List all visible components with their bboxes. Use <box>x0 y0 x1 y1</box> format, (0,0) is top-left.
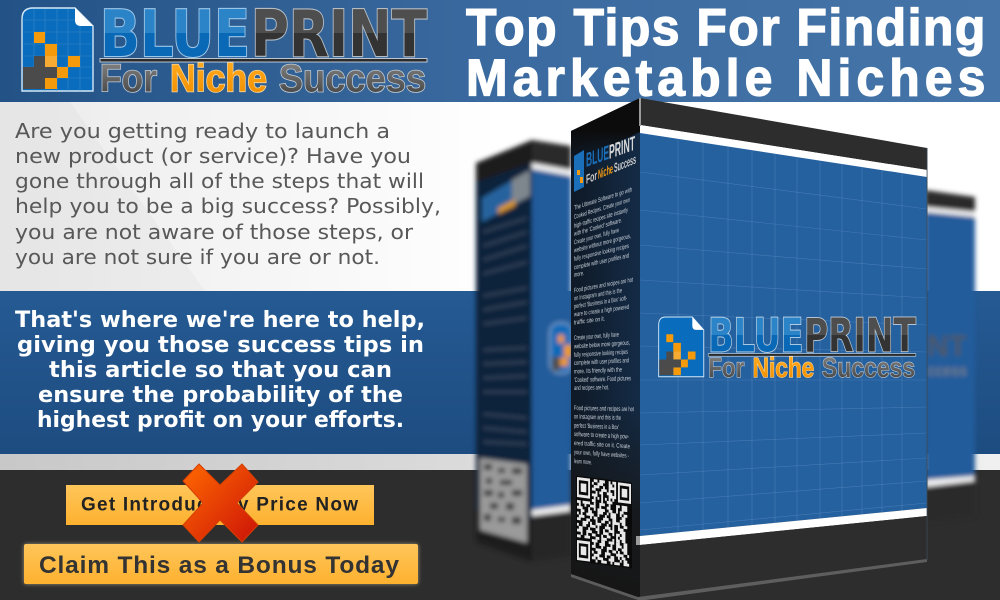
logo word BLUEPRINT: PRINT <box>251 0 427 72</box>
blurred back box: right: NT <box>927 330 967 363</box>
box front top band <box>640 98 927 170</box>
title <box>466 0 985 107</box>
side description text: learn more. <box>574 458 592 466</box>
box corner highlight <box>636 98 641 545</box>
main product box <box>571 98 928 600</box>
side description text: Food pictures and recipes are hot <box>574 405 634 413</box>
side description text: website without more gorgeous, <box>573 233 631 255</box>
side description text: on Instagram and this is the <box>574 287 622 302</box>
side description text: Create your own, fully have <box>574 331 619 342</box>
box side panel: PRINT <box>609 132 635 164</box>
highlighted paragraph: ensure the probability of the <box>38 382 403 408</box>
side description text: more. Its friendly with the <box>574 367 622 375</box>
header band <box>0 0 1000 102</box>
main product box: Success <box>614 152 636 175</box>
highlighted paragraph: highest profit on your efforts. <box>37 407 404 433</box>
side description text: The Ultimate Software to go with <box>574 187 632 212</box>
claim bonus button: Claim This as a Bonus Today <box>39 552 399 579</box>
side description text: perfect 'Business in a Box' <box>574 423 619 431</box>
box logo word: BLUE <box>708 310 803 363</box>
old price button <box>66 485 374 525</box>
intro paragraph: gone through all of the steps that will <box>15 169 424 193</box>
box front blue panel with grid <box>640 133 927 536</box>
logo tagline: Success <box>279 58 426 100</box>
side description text: Create your own, fully have <box>574 227 619 246</box>
logo word BLUEPRINT <box>100 0 427 72</box>
box right edge <box>926 148 928 560</box>
intro paragraph: new product (or service)? Have you <box>15 144 411 168</box>
side description text: more. <box>574 270 584 279</box>
side description text: your own, fully have websites - <box>574 449 629 460</box>
side description text: high-traffic recipes site instantly <box>574 207 628 230</box>
old price button: Get Introductory Price Now <box>81 494 358 516</box>
box bottom edge highlight <box>638 559 927 600</box>
side description text: ered traffic site on it. Create <box>574 440 630 450</box>
side description text: software to create a high pow- <box>574 431 629 441</box>
highlighted paragraph: giving you those success tips in <box>17 332 424 358</box>
side description text: 'Cooked' software. Food pictures <box>574 375 631 384</box>
blurred back box: left <box>476 140 572 562</box>
side description text: perfect 'Business in a Box' soft- <box>574 295 627 310</box>
side description text: ware to create a high powered <box>573 304 629 319</box>
claim bonus button <box>24 544 418 584</box>
side description text: complete with user profiles and <box>574 357 629 367</box>
box front top white stripe <box>640 125 927 177</box>
logo tagline: Niche <box>170 58 267 100</box>
side description text <box>573 187 634 466</box>
side description text: traffic site on it. <box>574 315 605 326</box>
side description text: fully responsive looking recipes <box>574 349 628 359</box>
intro paragraph: you are not sure if you are or not. <box>15 245 380 269</box>
side description text: fully responsive looking recipes <box>574 243 629 263</box>
intro paragraph <box>15 119 441 269</box>
box front bottom white stripe <box>640 508 927 545</box>
box logo tagline: Success <box>822 352 915 383</box>
side description text: on Instagram and this is the <box>574 414 621 422</box>
QR code <box>576 475 632 569</box>
header logo <box>22 0 427 100</box>
side description text: Cooked Recipes. Create your own <box>574 197 630 221</box>
logo word BLUEPRINT: BLUE <box>100 0 250 72</box>
icon: red cross <box>183 464 258 542</box>
box side panel <box>571 98 640 600</box>
box front logo <box>659 310 916 383</box>
box logo tagline: For <box>708 352 744 383</box>
logo tagline <box>100 58 426 100</box>
intro paragraph: you are not aware of those steps, or <box>15 220 414 244</box>
side logo <box>574 132 636 192</box>
logo divider line <box>100 58 427 62</box>
lower blue band background <box>0 291 1000 454</box>
box logo word: PRINT <box>804 310 916 363</box>
intro paragraph: Are you getting ready to launch a <box>15 119 390 143</box>
highlighted paragraph <box>15 307 425 433</box>
side description text: complete with user profiles and <box>574 252 629 271</box>
logo icon <box>22 8 93 91</box>
box front bottom band <box>640 516 927 597</box>
box logo divider <box>708 354 916 356</box>
light background section <box>0 102 1000 291</box>
grey strip <box>0 454 1000 470</box>
side description text: Food pictures and recipes are hot <box>574 277 633 294</box>
intro paragraph: help you to be a big success? Possibly, <box>15 194 441 218</box>
logo tagline: For <box>100 58 157 100</box>
dark footer background <box>0 470 1000 600</box>
box logo tagline <box>708 352 915 383</box>
side logo: Niche <box>598 161 613 182</box>
box logo icon <box>659 317 704 377</box>
blurred back box: right: ccess <box>927 361 967 380</box>
side description text: website below more gorgeous, <box>573 340 630 351</box>
blurred back box: right <box>925 190 975 523</box>
box logo word <box>708 310 916 363</box>
side description text: with the 'Cooked' software. <box>573 217 622 238</box>
highlighted paragraph: this article so that you can <box>49 357 392 383</box>
side logo: BLUE <box>586 141 609 172</box>
side logo: For <box>586 168 597 187</box>
box logo tagline: Niche <box>753 352 814 383</box>
title: Marketable Niches <box>466 49 985 107</box>
side description text: and recipes are hot. <box>574 384 609 392</box>
highlighted paragraph: That's where we're here to help, <box>15 307 425 333</box>
